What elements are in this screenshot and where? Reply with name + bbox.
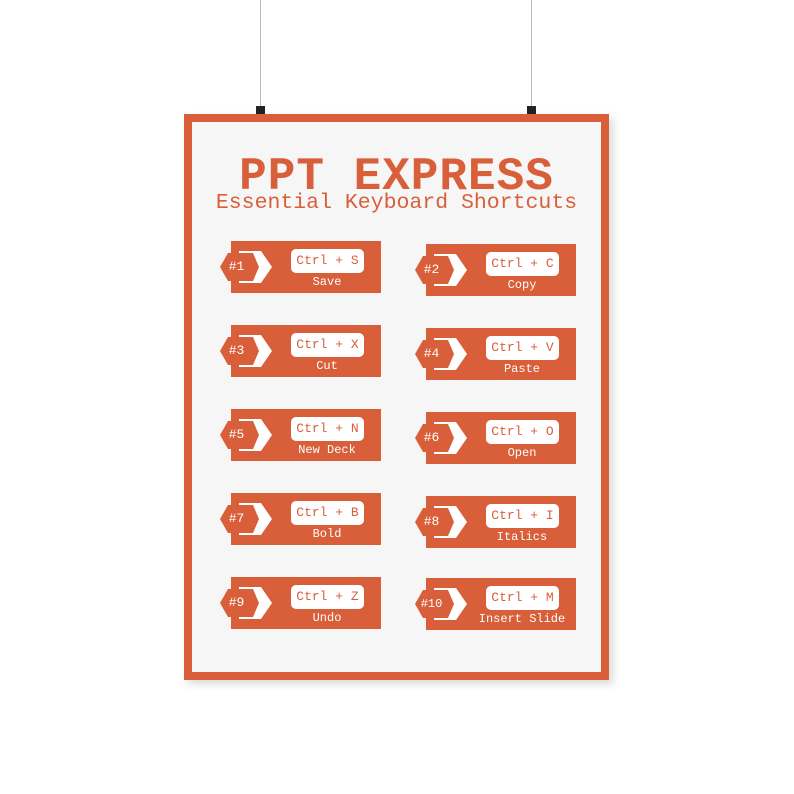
card 10: Insert Slide bbox=[479, 612, 565, 626]
card 10: Ctrl + M bbox=[491, 590, 554, 605]
subtitle: Essential Keyboard Shortcuts bbox=[216, 191, 577, 215]
poster bbox=[184, 114, 609, 680]
card 10 bbox=[415, 578, 576, 630]
card 2 bbox=[415, 244, 576, 296]
card 9: #9 bbox=[229, 595, 244, 610]
card 8: Ctrl + I bbox=[491, 508, 554, 523]
card 1: Ctrl + S bbox=[296, 253, 359, 268]
card 7 bbox=[220, 493, 381, 545]
card 7: Bold bbox=[313, 527, 341, 541]
card 4: Paste bbox=[504, 362, 540, 376]
card 8: Italics bbox=[497, 530, 547, 544]
card 9 bbox=[220, 577, 381, 629]
card 7: #7 bbox=[229, 511, 244, 526]
card 3 bbox=[220, 325, 381, 377]
card 7: Ctrl + B bbox=[296, 505, 359, 520]
card 5: Ctrl + N bbox=[296, 421, 359, 436]
card 3: Cut bbox=[316, 359, 338, 373]
card 4: #4 bbox=[424, 346, 439, 361]
card 5: New Deck bbox=[298, 443, 356, 457]
card 2: #2 bbox=[424, 262, 439, 277]
card 4: Ctrl + V bbox=[491, 340, 554, 355]
card 10: #10 bbox=[421, 597, 442, 611]
card 1 bbox=[220, 241, 381, 293]
card 4 bbox=[415, 328, 576, 380]
card 2: Ctrl + C bbox=[491, 256, 554, 271]
card 8: #8 bbox=[424, 514, 439, 529]
card 3: #3 bbox=[229, 343, 244, 358]
card 9: Ctrl + Z bbox=[296, 589, 359, 604]
card 6: Ctrl + O bbox=[491, 424, 554, 439]
card 3: Ctrl + X bbox=[296, 337, 359, 352]
card 6: #6 bbox=[424, 430, 439, 445]
card 1: #1 bbox=[229, 259, 244, 274]
card 2: Copy bbox=[508, 278, 536, 292]
card 9: Undo bbox=[313, 611, 341, 625]
card 6 bbox=[415, 412, 576, 464]
hanger wires bbox=[256, 0, 536, 114]
card 1: Save bbox=[313, 275, 341, 289]
card 5: #5 bbox=[229, 427, 244, 442]
card 6: Open bbox=[508, 446, 536, 460]
card 8 bbox=[415, 496, 576, 548]
title: PPT EXPRESS bbox=[239, 151, 554, 203]
card 5 bbox=[220, 409, 381, 461]
